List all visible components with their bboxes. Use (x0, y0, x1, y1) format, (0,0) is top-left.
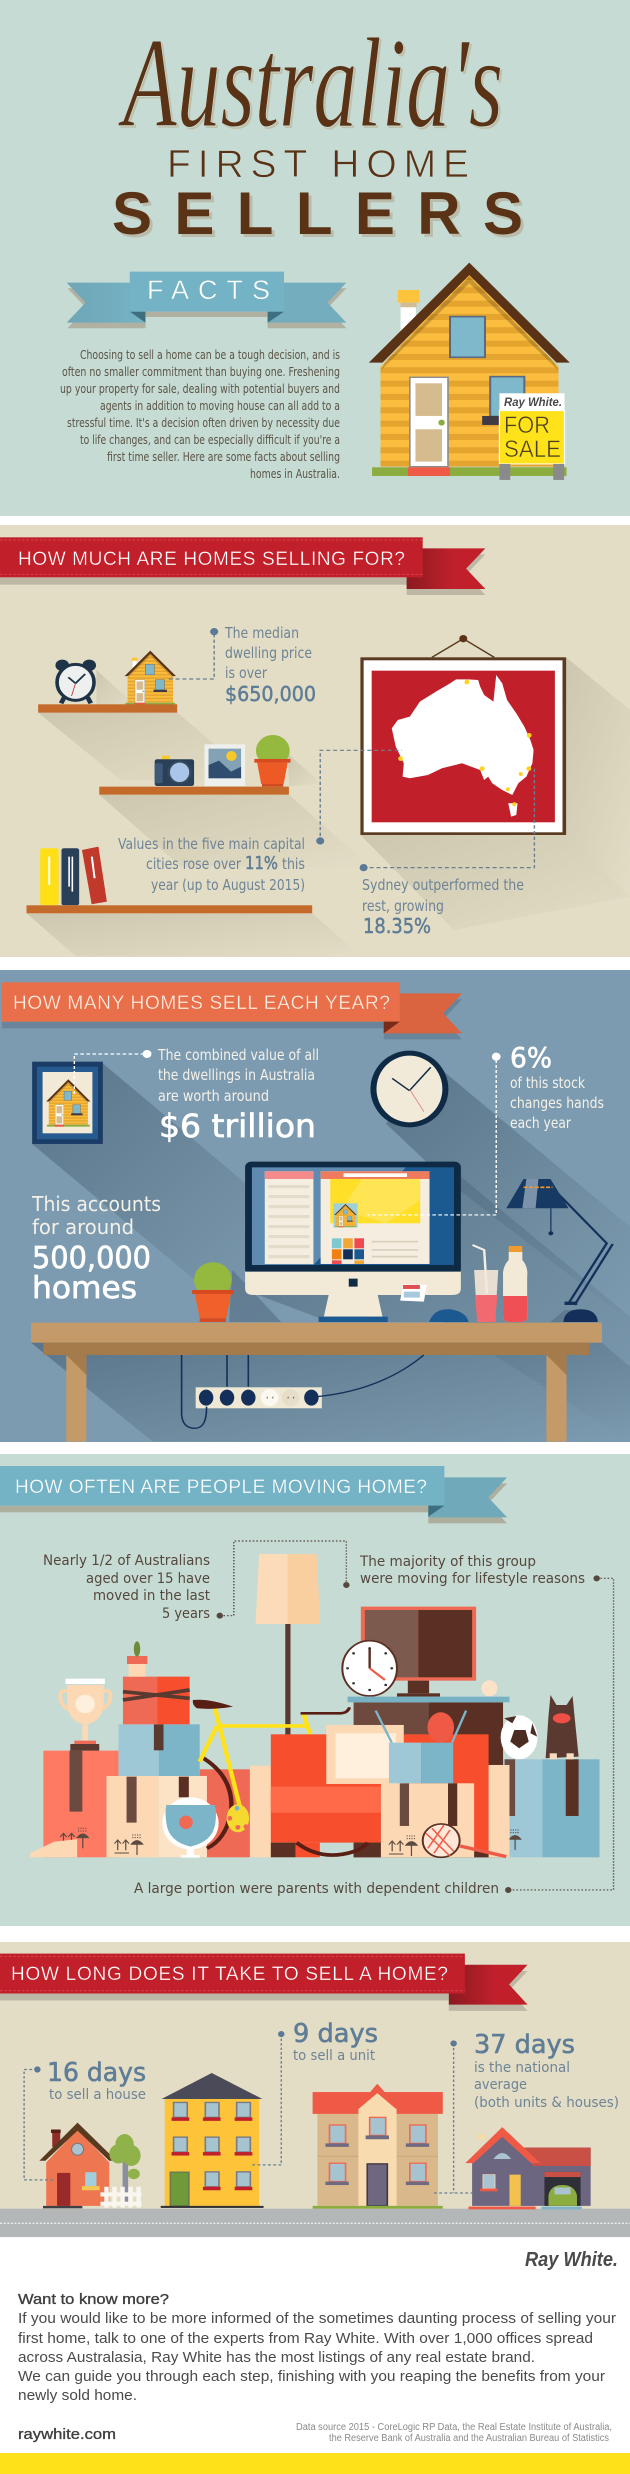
icon: power strip with cables (182, 1355, 424, 1428)
illustration group (0, 1954, 630, 2237)
section heading: HOW LONG DOES IT TAKE TO SELL A HOME? (11, 1964, 448, 1985)
callout: nearly half: aged over 15 have (86, 1571, 210, 1587)
callout: 6 percent: each year (510, 1114, 572, 1132)
callout: median price: $650,000 (225, 682, 316, 706)
icon: bottle (503, 1246, 527, 1322)
callout connectors (24, 2034, 472, 2193)
ribbon: facts (67, 272, 346, 328)
callout: combined value (157, 1046, 319, 1145)
callout connectors (74, 1054, 496, 1215)
footer text: We can guide you through each step, finishing with you reaping the benefits from your (18, 2369, 605, 2385)
icon: soccer ball (501, 1715, 538, 1759)
intro text: up your property for sale, dealing with potential buyers and (60, 381, 340, 396)
icon: moving clock (342, 1641, 397, 1696)
illustration group (0, 1466, 614, 1893)
website: raywhite.com (18, 2426, 116, 2443)
intro text: often no smaller commitment than buying one. Freshening (62, 364, 340, 379)
callout: capital cities: this (282, 855, 305, 873)
callout: 16 days: to sell a house (49, 2087, 146, 2103)
data source (296, 2422, 612, 2444)
callout: parents: A large portion were parents with dependent children (134, 1881, 499, 1897)
ribbon: blue (0, 1466, 507, 1523)
callout: 500,000 homes: for around (32, 1215, 134, 1239)
callout: 9 days (293, 2019, 378, 2064)
section heading: HOW MUCH ARE HOMES SELLING FOR? (18, 549, 405, 570)
callout: nearly half: Nearly 1/2 of Australians (43, 1553, 210, 1569)
section background (0, 525, 630, 957)
callout: capital cities: 11% (245, 853, 278, 874)
section background (0, 1454, 630, 1926)
icon: bicycle (193, 1700, 350, 1848)
desk (31, 1323, 602, 1442)
ribbon: red tail (0, 537, 485, 595)
logo: Ray White: Ray White. (525, 2249, 618, 2271)
illustration group (0, 537, 630, 957)
icon: glass with straw (473, 1245, 498, 1322)
panel: how much are homes selling for (0, 525, 630, 957)
callout: nearly half: moved in the last (93, 1588, 210, 1604)
icon: desk lamp (506, 1179, 613, 1322)
title: SELLERS (115, 183, 526, 250)
callout: combined value: are worth around (158, 1087, 269, 1105)
callout: 37 days: is the national (474, 2060, 570, 2076)
callout dots (143, 1050, 501, 1061)
connector dots (217, 1575, 600, 1893)
callout: 6 percent (510, 1041, 604, 1132)
road (0, 2209, 630, 2237)
section heading: HOW OFTEN ARE PEOPLE MOVING HOME? (15, 1477, 427, 1498)
callout: 37 days (474, 2030, 619, 2111)
icon: small house (125, 651, 176, 705)
callout: median price: dwelling price (225, 644, 312, 662)
icon: framed map of Australia (360, 635, 566, 835)
callout: median price (224, 624, 316, 706)
intro text: first time seller. Here are some facts about selling (107, 449, 340, 464)
icon: house with for sale sign (369, 263, 570, 480)
callout: nearly half: 5 years (162, 1606, 210, 1622)
ribbon: facts: FACTS (147, 275, 270, 305)
intro text: to life changes, and can be especially difficult if you're a (80, 432, 340, 447)
ribbon: orange (2, 982, 462, 1039)
panel: how often are people moving home (0, 1454, 630, 1926)
data source: Data source 2015 - CoreLogic RP Data, the Real Estate Institute of Australia, (296, 2422, 612, 2433)
callout: 37 days: (both units & houses) (474, 2095, 619, 2111)
icon: house with for sale sign: Ray White. (504, 395, 562, 409)
callout: Sydney: 18.35% (363, 914, 431, 938)
shelf 2 (99, 787, 289, 795)
callout: capital cities: cities rose over (146, 855, 242, 873)
title: SELLERS (112, 180, 523, 247)
footer heading: Want to know more? (18, 2292, 169, 2308)
callout: lifestyle: The majority of this group (359, 1554, 536, 1570)
callout: combined value: $6 trillion (159, 1107, 316, 1145)
callout: nearly half (43, 1553, 210, 1622)
long shadows (31, 1063, 630, 1442)
shelf shadows (27, 657, 630, 957)
icon: fishbowl (162, 1797, 219, 1858)
icon: photo (205, 744, 245, 786)
icon: orange house with tree (39, 2123, 141, 2208)
callout: 16 days (47, 2058, 146, 2103)
callout: 9 days: to sell a unit (293, 2048, 375, 2064)
intro text: stressful time. It's a decision often driven by necessity due (67, 415, 340, 430)
icon: sticky cards (400, 1284, 427, 1302)
callout: 500,000 homes: 500,000 (32, 1241, 151, 1276)
icon: purple house with garage (465, 2127, 591, 2209)
icon: picture frame (326, 1725, 404, 1784)
footer text: across Australasia, Ray White has the most listings of any real estate brand. (18, 2350, 535, 2366)
footer text: first home, talk to one of the experts from Ray White. With over 1,000 offices spread (18, 2331, 593, 2347)
cream box right (381, 1765, 509, 1857)
callout: lifestyle: were moving for lifestyle reasons (360, 1571, 585, 1587)
title: FIRST HOME (167, 143, 469, 186)
callout dots (210, 628, 368, 871)
section background (0, 970, 630, 1442)
footer text: newly sold home. (18, 2388, 137, 2404)
cream box tall (250, 1766, 271, 1857)
callout: combined value: the dwellings in Australia (158, 1066, 315, 1084)
footer text: If you would like to be more informed of the sometimes daunting process of selling your (18, 2311, 616, 2327)
icon: wall clock (370, 1051, 448, 1127)
callout connectors (169, 632, 534, 868)
intro text: homes in Australia. (250, 466, 340, 481)
blue box right (493, 1759, 599, 1857)
icon: tan townhouse (313, 2084, 443, 2209)
callout: lifestyle (359, 1554, 585, 1587)
callout: 37 days: 37 days (474, 2030, 575, 2060)
icon: mouse (429, 1309, 468, 1322)
callout: median price: The median (224, 624, 299, 642)
icon: trophy (60, 1679, 110, 1744)
panel: how many homes sell each year (0, 970, 630, 1442)
section background (0, 1942, 630, 2209)
callout: Sydney (362, 876, 524, 938)
intro background (0, 0, 630, 516)
callout: combined value: The combined value of all (157, 1046, 319, 1064)
red box behind bike (200, 1769, 250, 1857)
callout: 500,000 homes: homes (32, 1271, 137, 1306)
callout dots (34, 2031, 457, 2073)
callout: Sydney: rest, growing (362, 897, 444, 915)
icon: books (40, 847, 107, 905)
shelf 3 (27, 905, 312, 913)
shelf 1 (38, 704, 177, 713)
icon: computer monitor (245, 1162, 461, 1322)
icon: house with for sale sign: SALE (504, 436, 561, 463)
icon: camera (155, 756, 194, 786)
ribbon: red tail (0, 1954, 528, 2011)
icon: house with for sale sign: FOR (504, 412, 550, 439)
icon: armchair (271, 1734, 489, 1857)
callout: capital cities (118, 835, 305, 894)
icon: television (361, 1607, 476, 1697)
yellow footer bar (0, 2453, 630, 2474)
callout: Sydney: Sydney outperformed the (362, 876, 524, 894)
callout: 6 percent: of this stock (510, 1074, 585, 1092)
callout: capital cities: year (up to August 2015) (151, 876, 305, 894)
icon: small box with rackets (376, 1711, 506, 1857)
callout: 6 percent: changes hands (510, 1094, 604, 1112)
callout: 37 days: average (474, 2077, 527, 2093)
callout: 6 percent: 6% (510, 1041, 552, 1074)
dresser (348, 1680, 509, 1857)
title (112, 12, 526, 250)
data source: the Reserve Bank of Australia and the Australian Bureau of Statistics (329, 2433, 609, 2444)
callout: 500,000 homes (31, 1192, 161, 1306)
footer text (18, 2311, 616, 2404)
intro text: Choosing to sell a home can be a tough decision, and is (80, 347, 340, 362)
panel: footer (0, 2249, 630, 2474)
icon: cactus pot (254, 735, 291, 787)
callout: capital cities: Values in the five main capital (118, 835, 305, 853)
cream box stack (106, 1641, 207, 1857)
icon: cactus pot (192, 1262, 234, 1322)
icon: framed house picture (32, 1062, 103, 1144)
callout: 9 days: 9 days (293, 2019, 378, 2049)
intro text: agents in addition to moving house can all add to a (100, 398, 340, 413)
callout: 500,000 homes: This accounts (31, 1192, 161, 1216)
icon: yellow apartment building (161, 2073, 264, 2208)
panel: intro (0, 0, 630, 516)
red box left (43, 1744, 119, 1857)
intro text (60, 347, 340, 481)
illustration group (2, 982, 630, 1442)
dotted connectors (220, 1541, 614, 1890)
panel: how long does it take to sell a home (0, 1942, 630, 2237)
callout: 16 days: 16 days (47, 2058, 146, 2088)
callout: median price: is over (225, 664, 268, 682)
icon: alarm clock (55, 660, 96, 703)
section heading: HOW MANY HOMES SELL EACH YEAR? (13, 993, 390, 1014)
icon: floor lamp (256, 1554, 320, 1737)
icon: dog (546, 1695, 579, 1759)
icon: shoe (30, 1839, 77, 1857)
